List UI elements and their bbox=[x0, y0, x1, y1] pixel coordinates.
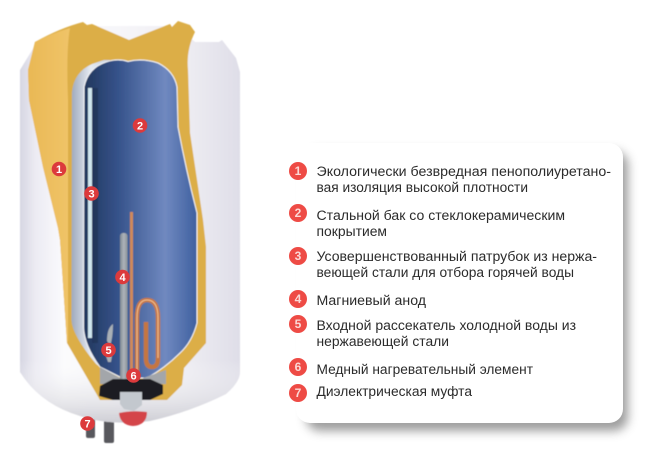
plug bbox=[120, 392, 142, 411]
black flange bbox=[99, 379, 163, 400]
item 5: нержавеющей стали bbox=[316, 334, 449, 349]
grey collar at tank base bbox=[100, 367, 166, 384]
callout numbers on illustration bbox=[52, 118, 147, 431]
item 4: 4 bbox=[295, 292, 302, 306]
marker 2: 2 bbox=[137, 120, 143, 132]
item 3: веющей стали для отбора горячей воды bbox=[316, 265, 574, 280]
silver inner wall bbox=[72, 60, 110, 367]
marker 4: 4 bbox=[119, 272, 126, 284]
item 4: Магниевый анод bbox=[316, 293, 426, 308]
marker 5: 5 bbox=[105, 345, 112, 357]
item 2: 2 bbox=[295, 206, 302, 220]
marker 6: 6 bbox=[130, 370, 137, 382]
hot water pipe bbox=[88, 88, 92, 338]
copper heating element bbox=[132, 212, 158, 374]
item 3 bbox=[289, 247, 597, 280]
item 7 bbox=[289, 384, 472, 402]
legend panel bbox=[289, 143, 628, 431]
outlet pipes bbox=[86, 418, 114, 443]
magnesium anode bbox=[120, 233, 128, 393]
item 2: покрытием bbox=[316, 224, 387, 239]
marker 3: 3 bbox=[88, 188, 95, 200]
item 3: 3 bbox=[295, 249, 302, 263]
marker 7: 7 bbox=[84, 418, 91, 430]
marker 1: 1 bbox=[56, 164, 62, 176]
cold water diffuser bbox=[106, 324, 113, 362]
marker 1 bbox=[52, 162, 66, 176]
item 7: Диэлектрическая муфта bbox=[316, 384, 472, 399]
item 5 bbox=[289, 315, 576, 349]
item 6: 6 bbox=[295, 360, 302, 374]
marker 2 bbox=[133, 118, 147, 133]
item 4 bbox=[289, 290, 426, 308]
item 2 bbox=[289, 204, 565, 239]
white outer casing bbox=[20, 26, 240, 423]
marker 3 bbox=[84, 186, 99, 201]
steel tank bbox=[84, 60, 197, 378]
red dielectric knob bbox=[119, 411, 147, 426]
item 3: Усовершенствованный патрубок из нержа- bbox=[316, 249, 597, 264]
item 1: вая изоляция высокой плотности bbox=[316, 180, 528, 195]
marker 6 bbox=[126, 368, 141, 383]
item 5: Входной рассекатель холодной воды из bbox=[316, 318, 576, 333]
item 7: 7 bbox=[295, 386, 302, 400]
item 2: Стальной бак со стеклокерамическим bbox=[316, 208, 565, 223]
item 1: Экологически безвредная пенополиуретано- bbox=[316, 164, 611, 179]
water heater cutaway illustration bbox=[20, 21, 240, 443]
marker 4 bbox=[115, 270, 130, 284]
marker 5 bbox=[101, 343, 116, 357]
item 5: 5 bbox=[295, 317, 302, 331]
marker 7 bbox=[80, 416, 95, 431]
item 6: Медный нагревательный элемент bbox=[316, 362, 533, 377]
item 1: 1 bbox=[295, 164, 302, 178]
item 1 bbox=[289, 162, 611, 195]
foam insulation bbox=[28, 21, 206, 400]
item 6 bbox=[289, 358, 533, 377]
